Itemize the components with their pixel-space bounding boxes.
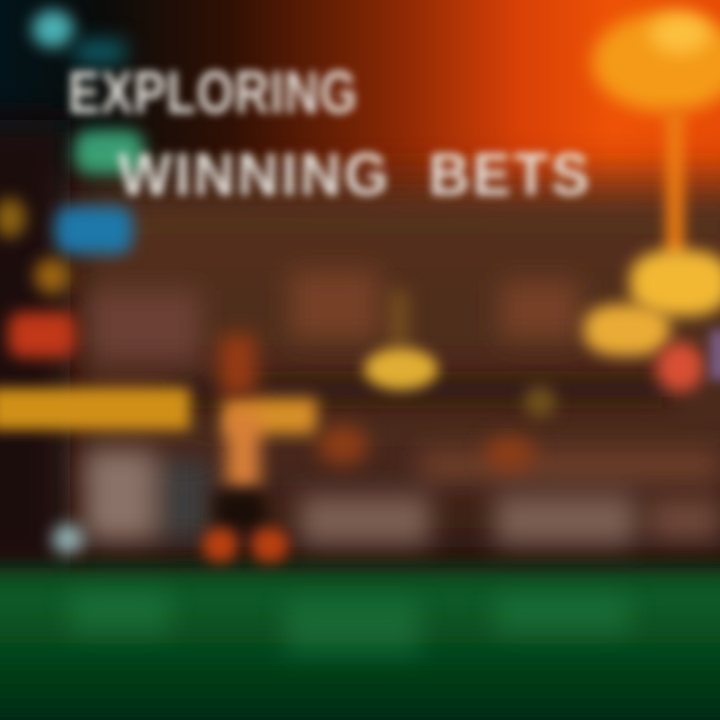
icon: blue badge bbox=[55, 206, 133, 254]
trophy base left bbox=[584, 304, 670, 356]
trophy highlight bbox=[650, 14, 710, 54]
violet coin bbox=[710, 330, 720, 380]
title line 2: WINNING BETS bbox=[118, 141, 592, 208]
orange post bbox=[220, 335, 256, 395]
icon: dot trail bbox=[75, 40, 125, 64]
orange glows bbox=[318, 425, 368, 465]
title line 1: EXPLORING bbox=[68, 59, 358, 126]
title accent bbox=[74, 130, 144, 174]
icon: glowing dot bbox=[32, 10, 74, 48]
center yellow lamp bbox=[364, 348, 438, 390]
white spot bbox=[52, 524, 84, 554]
title bbox=[62, 59, 594, 208]
orange feet bbox=[203, 528, 237, 562]
orange figure bbox=[226, 410, 260, 490]
grass highlights bbox=[70, 590, 630, 655]
orange feet right bbox=[252, 528, 288, 562]
orange banner right bbox=[225, 398, 317, 434]
orange banner bbox=[0, 388, 190, 430]
trophy top bbox=[592, 12, 720, 112]
red coin bbox=[656, 342, 704, 392]
small lamp bbox=[524, 386, 556, 418]
icon: red badge bbox=[8, 312, 76, 358]
icon: amber marker bbox=[34, 258, 70, 294]
center yellow lamp stem bbox=[390, 290, 408, 350]
trophy stem bbox=[666, 110, 684, 260]
trophy base right bbox=[630, 250, 720, 316]
dark figure bbox=[215, 490, 265, 530]
icon: yellow marker bbox=[0, 198, 26, 238]
brown stands bbox=[85, 270, 720, 545]
orange glow right bbox=[485, 436, 535, 470]
